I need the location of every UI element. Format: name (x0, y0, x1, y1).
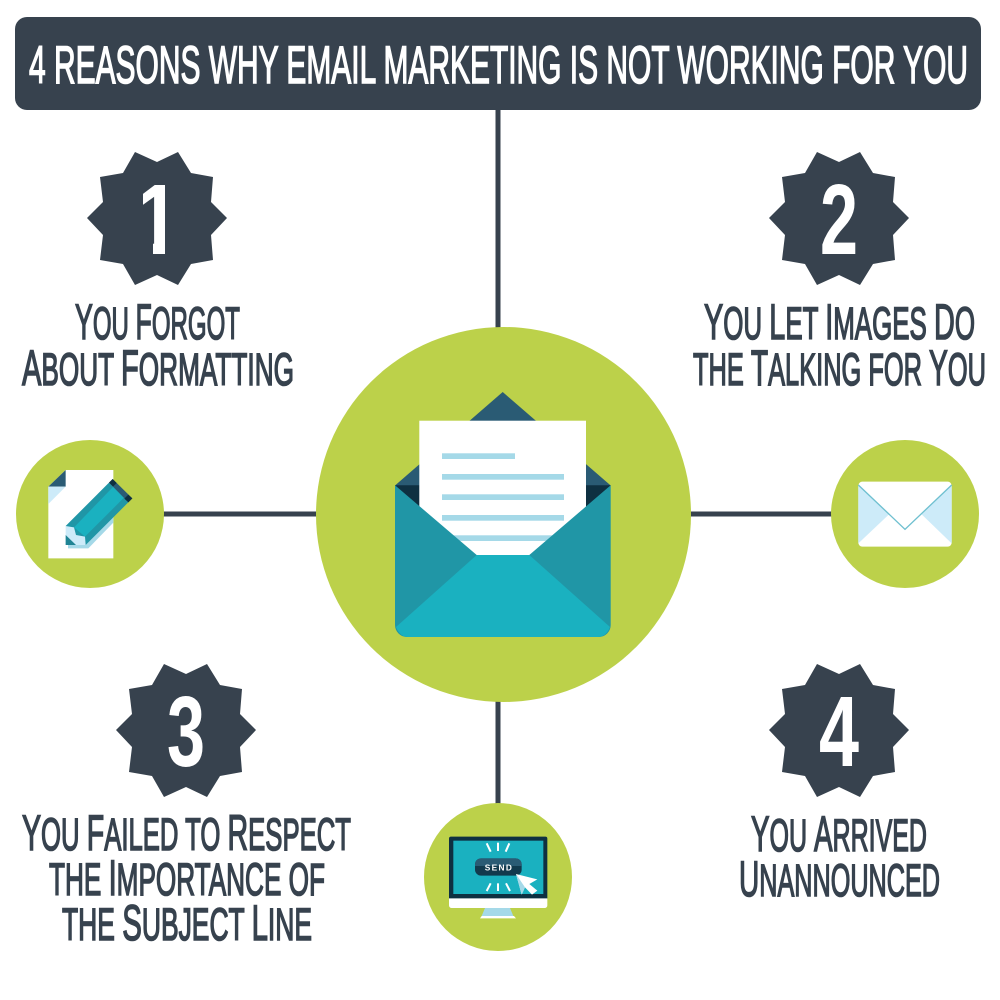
icon: closed envelope (831, 440, 979, 588)
title banner (15, 17, 981, 110)
heading: reason 3 (22, 805, 351, 951)
badge: number 1: 1 (134, 164, 182, 276)
badge: number 1 (87, 152, 227, 285)
icon: document and pencil (16, 440, 164, 588)
heading: reason 3: THE IMPORTANCE OF (49, 850, 325, 906)
heading: reason 3: THE SUBJECT LINE (62, 895, 312, 951)
badge: number 3: 3 (167, 676, 205, 788)
heading: reason 1: YOU FORGOT (75, 294, 240, 350)
heading: reason 3: YOU FAILED TO RESPECT (22, 805, 351, 861)
connector lines (162, 108, 833, 806)
heading: reason 1 (22, 294, 294, 396)
heading: reason 2: YOU LET IMAGES DO (704, 294, 975, 350)
heading: reason 4 (739, 806, 940, 907)
icon: monitor with send button: SEND (485, 862, 513, 872)
letter (419, 421, 586, 561)
icon: central circle with open envelope and letter (316, 327, 691, 702)
icon: monitor with send button (424, 803, 572, 951)
heading: reason 4: YOU ARRIVED (751, 806, 927, 862)
heading: reason 2 (693, 294, 986, 396)
badge: number 4: 4 (819, 676, 859, 788)
badge: number 3 (116, 664, 256, 797)
badge: number 2 (769, 152, 909, 285)
heading: reason 1: ABOUT FORMATTING (22, 340, 294, 396)
badge: number 4 (769, 664, 909, 797)
badge: number 2: 2 (820, 164, 858, 276)
